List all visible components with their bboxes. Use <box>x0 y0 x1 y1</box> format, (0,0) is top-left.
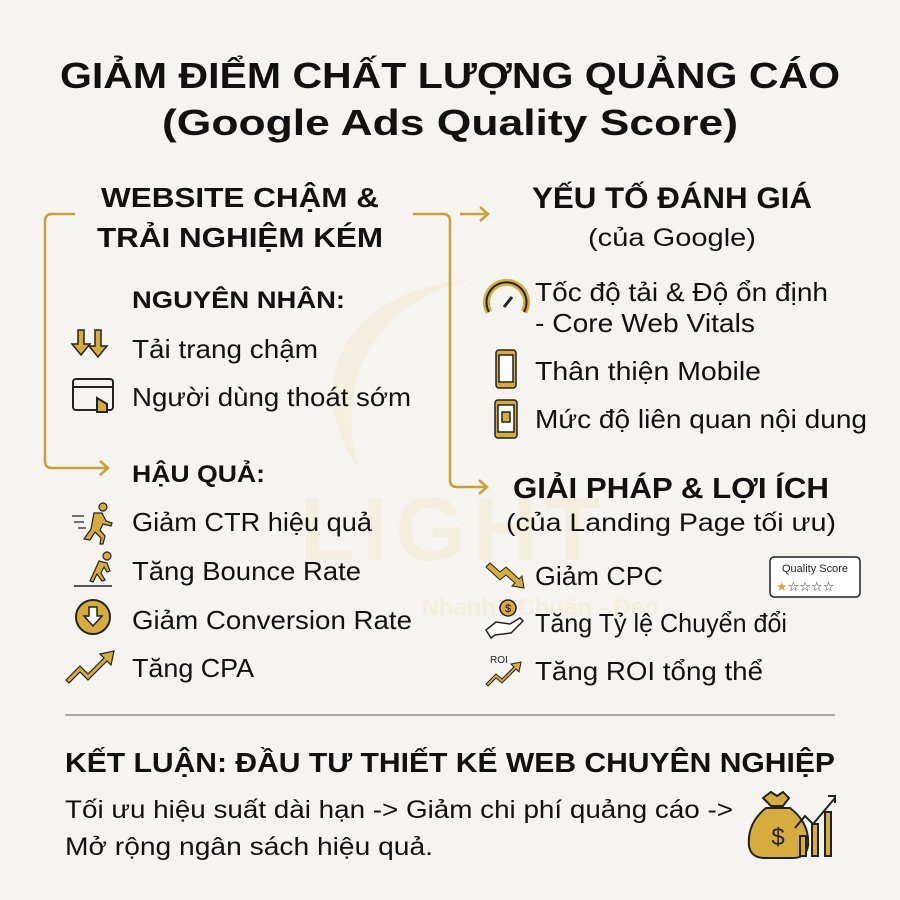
quality score badge: Quality Score <box>782 563 848 575</box>
panel: consequences: Tăng Bounce Rate <box>132 556 361 586</box>
title <box>60 54 840 143</box>
panel: factors: Mức độ liên quan nội dung <box>535 404 867 434</box>
panel: consequences: Giảm CTR hiệu quả <box>132 507 373 537</box>
title: (Google Ads Quality Score) <box>162 102 738 143</box>
panel: consequences: Giảm Conversion Rate <box>132 605 412 635</box>
panel: causes <box>72 286 411 412</box>
icon: down circle <box>76 600 110 634</box>
icon: browser click <box>73 379 113 412</box>
conclusion text: Mở rộng ngân sách hiệu quả. <box>65 833 433 861</box>
panel: factors: Thân thiện Mobile <box>535 356 761 386</box>
arrow: right bracket <box>413 207 488 494</box>
heading: evaluation factors <box>532 181 812 252</box>
panel: causes: NGUYÊN NHÂN: <box>132 286 345 314</box>
icon: gauge <box>486 282 526 312</box>
conclusion heading: KẾT LUẬN: ĐẦU TƯ THIẾT KẾ WEB CHUYÊN NGHIỆP <box>65 747 835 778</box>
panel: benefits: Giảm CPC <box>535 561 663 591</box>
panel: benefits: Tăng Tỷ lệ Chuyển đổi <box>535 608 787 638</box>
icon: hand with coin: $ <box>505 603 511 615</box>
heading: solutions: (của Landing Page tối ưu) <box>506 509 836 537</box>
quality score badge <box>770 557 860 597</box>
heading: solutions: GIẢI PHÁP & LỢI ÍCH <box>513 471 829 505</box>
panel: consequences: Tăng CPA <box>132 653 255 683</box>
icon: bounce <box>74 552 112 586</box>
panel: consequences: HẬU QUẢ: <box>132 459 265 488</box>
watermark logo: LIGHT <box>300 480 600 580</box>
conclusion text <box>65 796 733 861</box>
panel: causes: Tải trang chậm <box>132 334 318 364</box>
heading: evaluation factors: (của Google) <box>588 224 756 252</box>
watermark logo: Nhanh - Chuẩn - Đẹp <box>421 594 659 621</box>
heading: website slow <box>97 182 383 253</box>
icon: ROI trend: ROI <box>490 655 508 666</box>
panel: benefits <box>486 557 860 686</box>
panel: factors <box>486 277 867 438</box>
heading: website slow: WEBSITE CHẬM & <box>101 182 379 213</box>
icon: runner <box>72 503 112 544</box>
title: GIẢM ĐIỂM CHẤT LƯỢNG QUẢNG CÁO <box>60 54 840 96</box>
quality score badge: ★☆☆☆☆ <box>776 579 834 594</box>
icon: up trend <box>66 651 114 683</box>
heading: solutions <box>506 471 836 537</box>
panel: consequences <box>66 459 412 683</box>
watermark logo <box>300 280 659 621</box>
icon: hand with coin <box>486 600 523 638</box>
conclusion text: Tối ưu hiệu suất dài hạn -> Giảm chi phí quảng cáo -> <box>65 796 733 824</box>
heading: website slow: TRẢI NGHIỆM KÉM <box>97 221 383 253</box>
icon: down arrows <box>72 330 107 357</box>
panel: factors: Tốc độ tải & Độ ổn định <box>535 277 828 307</box>
heading: evaluation factors: YẾU TỐ ĐÁNH GIÁ <box>532 181 812 215</box>
icon: ROI trend <box>486 655 521 686</box>
panel: causes: Người dùng thoát sớm <box>132 382 411 412</box>
icon: money bag growth: $ <box>771 824 785 851</box>
icon: money bag growth <box>749 792 835 858</box>
arrow: left bracket <box>45 214 108 475</box>
icon: down trend <box>486 563 524 588</box>
panel: factors: - Core Web Vitals <box>535 308 755 338</box>
panel: benefits: Tăng ROI tổng thể <box>535 656 763 686</box>
icon: phone with content <box>495 400 517 438</box>
icon: phone <box>496 350 516 388</box>
